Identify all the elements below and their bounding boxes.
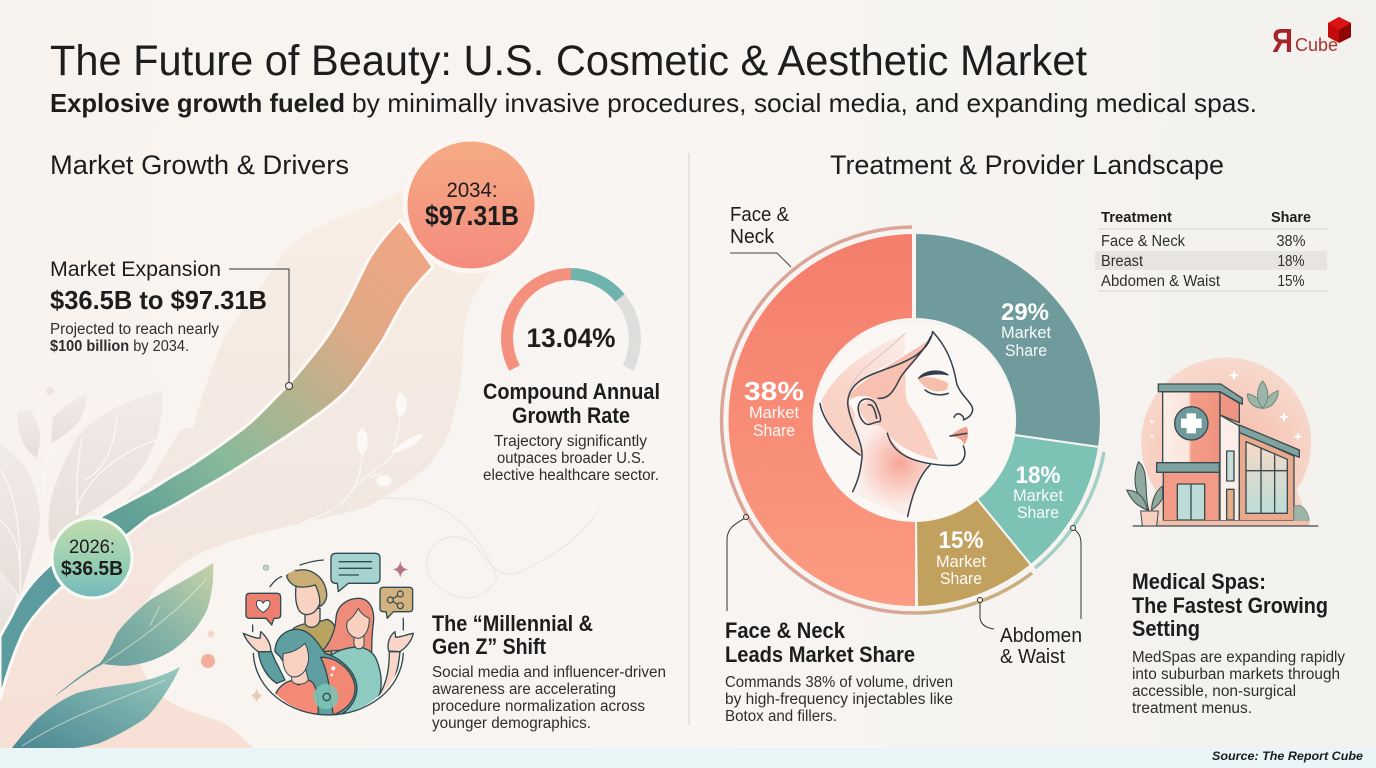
block: Compound Annual Growth Rate — [483, 379, 660, 484]
donut chart — [727, 233, 1101, 607]
donut labels: Share — [753, 422, 795, 440]
label: Face and Neck: Face & — [730, 204, 790, 226]
donut labels: Market — [1013, 487, 1063, 505]
milestone: 2034: $97.31B — [425, 200, 519, 231]
decorative curl lines — [295, 498, 598, 598]
table: treatment share: Abdomen & Waist — [1101, 273, 1221, 290]
logo: Report Cube: Cube — [1295, 35, 1338, 55]
block: Face and Neck leads market share: by high-frequency injectables like — [725, 691, 953, 708]
table: treatment share: 18% — [1278, 253, 1305, 270]
subtitle: Explosive growth fueled — [50, 88, 345, 118]
donut labels: 38% — [744, 376, 804, 406]
label: Face and Neck — [730, 204, 791, 267]
decorative pale leaves — [0, 390, 162, 637]
block: Medical Spas: Setting — [1132, 616, 1200, 641]
table: treatment share: 38% — [1276, 233, 1306, 250]
decorative dots — [201, 630, 215, 668]
block: Face and Neck leads market share: Face & Neck — [725, 618, 846, 643]
heading: Market Growth & Drivers: Market Growth & Drivers — [50, 150, 349, 180]
donut labels: 18% — [1016, 462, 1060, 489]
donut labels: Market — [936, 553, 986, 571]
donut labels: Share — [1017, 504, 1059, 522]
milestone: 2034 — [405, 139, 537, 271]
icon: millennial and gen z group — [243, 553, 413, 717]
block: Compound Annual Growth Rate: elective healthcare sector. — [483, 467, 659, 484]
donut labels: Market — [1001, 324, 1051, 342]
icon: face profile — [814, 322, 1014, 522]
block: Face and Neck leads market share: Leads Market Share — [725, 642, 915, 667]
table: treatment share: Face & Neck — [1101, 233, 1185, 250]
table: treatment share: Treatment — [1101, 209, 1172, 226]
gauge: CAGR — [507, 274, 635, 368]
table: treatment share: Breast — [1101, 253, 1144, 270]
block: Compound Annual Growth Rate: Compound Annual — [483, 379, 660, 404]
block: Compound Annual Growth Rate: Growth Rate — [512, 403, 630, 428]
block: Millennial and Gen Z shift: Social media and influencer-driven — [432, 664, 666, 681]
block: Market Expansion: $36.5B to $97.31B — [50, 285, 267, 315]
logo: Report Cube: R — [1272, 22, 1293, 59]
block: Market Expansion: Market Expansion — [50, 258, 221, 281]
label: Abdomen and Waist: Abdomen — [1000, 625, 1082, 647]
table: treatment share: 15% — [1278, 273, 1305, 290]
decorative peach flow shape — [0, 190, 490, 748]
subtitle: by minimally invasive procedures, social media, and expanding medical spas. — [352, 88, 1257, 118]
block: Medical Spas: MedSpas are expanding rapidly — [1132, 649, 1345, 666]
block: Medical Spas: treatment menus. — [1132, 700, 1252, 717]
segment: face and neck 38% — [727, 233, 916, 607]
block: Medical Spas: accessible, non-surgical — [1132, 683, 1296, 700]
decorative white sprig — [300, 393, 423, 523]
source note: Source: The Report Cube — [1212, 749, 1363, 763]
block: Face and Neck leads market share — [725, 618, 953, 725]
block: Millennial and Gen Z shift: younger demographics. — [432, 715, 591, 732]
block: Market Expansion: $100 billion by 2034. — [50, 338, 189, 355]
donut labels — [744, 299, 1063, 588]
table: treatment share: Share — [1271, 209, 1311, 226]
donut labels: 15% — [938, 527, 984, 554]
block: Medical Spas — [1132, 569, 1345, 717]
leader line: market expansion — [229, 269, 292, 390]
block: Medical Spas: The Fastest Growing — [1132, 593, 1328, 618]
block: Medical Spas: into suburban markets through — [1132, 666, 1340, 683]
donut labels: Market — [749, 404, 799, 422]
decorative leaf veins — [0, 415, 157, 595]
donut labels: Share — [1005, 342, 1047, 360]
table: treatment share — [1095, 209, 1327, 291]
gauge: CAGR: 13.04% — [526, 323, 616, 353]
segment: abdomen and waist 15% — [916, 499, 1031, 607]
title: The Future of Beauty: U.S. Cosmetic & Aesthetic Market — [50, 37, 1087, 85]
milestone: 2026: $36.5B — [61, 558, 123, 580]
heading: Treatment & Provider Landscape: Treatment & Provider Landscape — [830, 150, 1224, 180]
label: Abdomen and Waist: & Waist — [1000, 646, 1065, 668]
segment: 29% — [915, 233, 1101, 447]
green leaves — [12, 563, 213, 748]
leader line: 18 percent segment — [1070, 526, 1081, 619]
milestone: 2034: 2034: — [446, 179, 498, 202]
growth ribbon — [0, 220, 433, 700]
block: Millennial and Gen Z shift: awareness are accelerating — [432, 681, 616, 698]
block: Millennial and Gen Z shift — [432, 611, 666, 732]
donut labels: 29% — [1001, 299, 1049, 326]
leader line: face and neck callout — [727, 514, 748, 611]
footer band — [0, 748, 1376, 768]
block: Market Expansion — [50, 258, 267, 355]
logo: Report Cube — [1272, 17, 1351, 59]
milestone: 2026 — [52, 518, 132, 598]
block: Face and Neck leads market share: Botox and fillers. — [725, 708, 837, 725]
label: Face and Neck: Neck — [730, 226, 775, 248]
block: Compound Annual Growth Rate: outpaces broader U.S. — [497, 450, 645, 467]
icon: medical spa building — [1127, 358, 1318, 526]
block: Medical Spas: Medical Spas: — [1132, 569, 1266, 594]
block: Market Expansion: Projected to reach nearly — [50, 321, 219, 338]
segment: 18% — [977, 435, 1099, 565]
block: Millennial and Gen Z shift: procedure normalization across — [432, 698, 645, 715]
block: Compound Annual Growth Rate: Trajectory significantly — [494, 433, 647, 450]
block: Millennial and Gen Z shift: The “Millennial & — [432, 611, 593, 636]
label: Abdomen and Waist — [978, 598, 1082, 668]
donut outer arcs — [722, 227, 1104, 613]
donut labels: Share — [940, 570, 982, 588]
block: Millennial and Gen Z shift: Gen Z” Shift — [432, 634, 547, 659]
block: Face and Neck leads market share: Commands 38% of volume, driven — [725, 674, 953, 691]
milestone: 2026: 2026: — [69, 537, 115, 558]
